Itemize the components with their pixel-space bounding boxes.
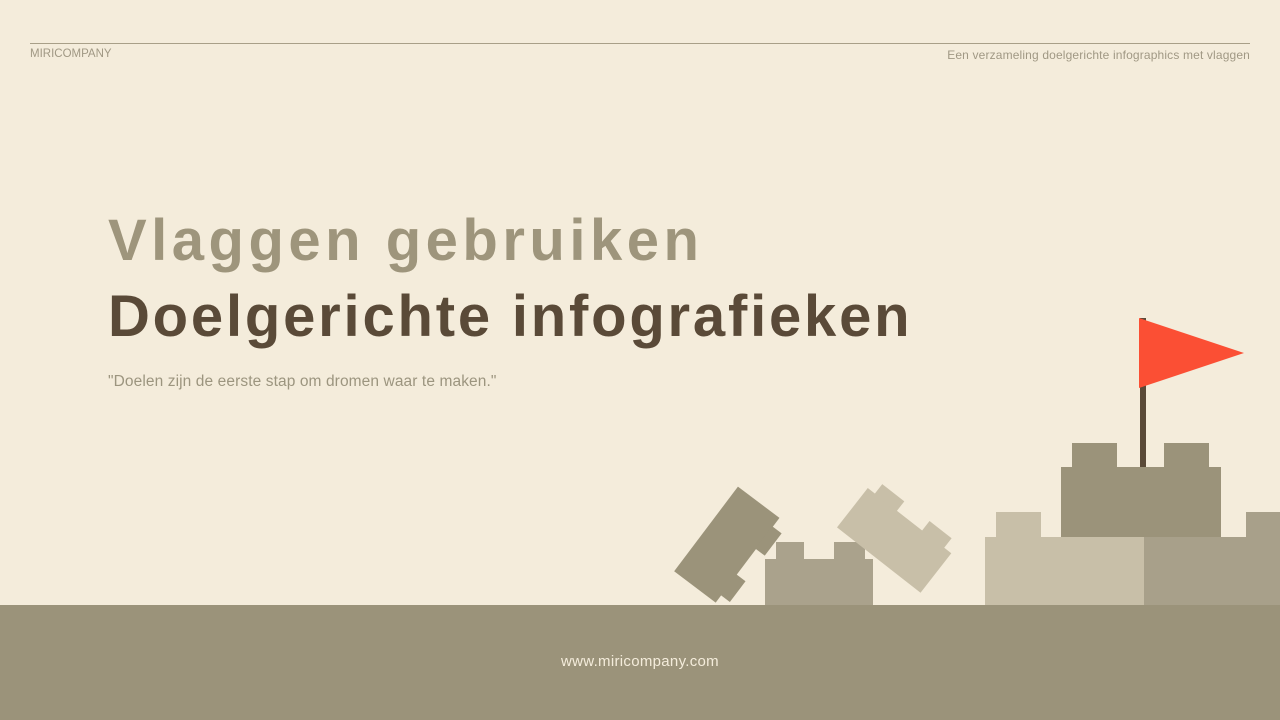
footer url: www.miricompany.com bbox=[561, 653, 719, 670]
title line 1: Vlaggen gebruiken bbox=[108, 208, 703, 273]
castle top block bbox=[1061, 443, 1221, 538]
footer band bbox=[0, 605, 1280, 720]
flag pole bbox=[1140, 318, 1146, 468]
tumbling light block bbox=[837, 479, 959, 593]
tumbling dark block bbox=[674, 487, 788, 609]
title line 2: Doelgerichte infografieken bbox=[108, 284, 912, 349]
quote: "Doelen zijn de eerste stap om dromen waar te maken." bbox=[108, 373, 496, 390]
castle lower right block bbox=[1144, 512, 1280, 605]
header line bbox=[30, 43, 1250, 44]
flag bbox=[1139, 318, 1244, 388]
brand label: MIRICOMPANY bbox=[30, 48, 112, 60]
small middle block bbox=[765, 542, 873, 605]
header tagline: Een verzameling doelgerichte infographics met vlaggen bbox=[947, 48, 1250, 62]
castle lower left block bbox=[985, 512, 1145, 605]
